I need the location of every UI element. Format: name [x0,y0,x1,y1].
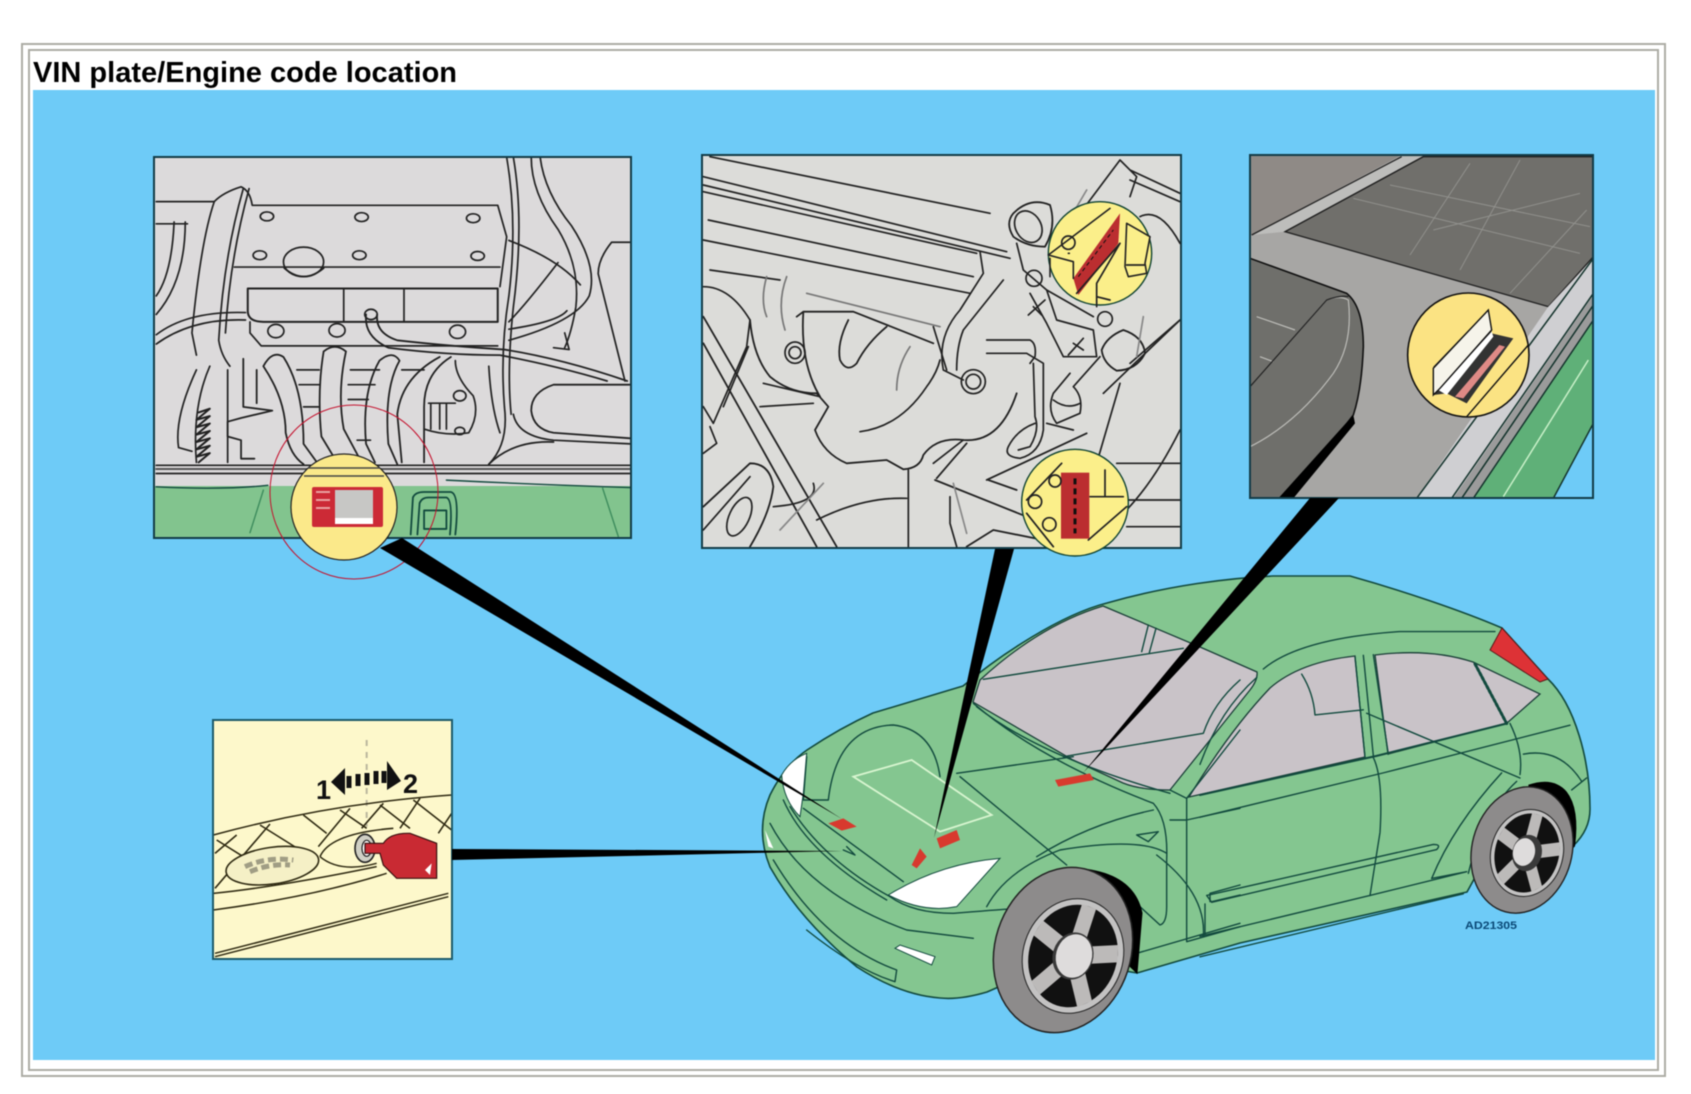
title: VIN plate/Engine code location [33,57,457,89]
far headlamp [782,753,807,817]
mat grid lines [1353,160,1590,293]
leader wedge: load floor to windscreen base [1083,498,1339,773]
red key [365,833,437,878]
magnifier: VIN plate [291,454,397,560]
car body [762,576,1590,998]
engine side line drawing [703,157,1180,547]
panel: grille key lock inset [213,720,452,959]
panel: load floor with VIN label [1250,155,1593,498]
rotation arrows and labels: 1 [316,775,331,805]
leader wedge: engine bay to car front [380,538,842,819]
leader wedge: engine side view to bonnet [934,549,1014,838]
leader wedge: key inset to grille [452,849,843,860]
red location markers [828,818,857,831]
panel: engine bay front view with VIN plate [154,157,631,538]
rotation arrows and labels: 2 [403,769,418,799]
grille and key drawing [213,740,452,957]
rear body lines [1200,632,1587,957]
seat shadow [1278,415,1355,498]
right sill strip [1417,258,1593,498]
lock [355,834,375,862]
engine line drawing [156,157,630,536]
front wheel arch shadow [1060,868,1142,973]
front door window [1189,656,1365,797]
fog lamp [895,945,935,965]
front body lines [765,625,1240,982]
rear wheel arch shadow [1528,782,1576,856]
panel: engine side view with engine code locations [702,155,1181,556]
dark carpet corner [1250,155,1402,235]
tail lamp [1490,628,1548,682]
magnifier: upper engine code [1048,202,1180,307]
windscreen [973,606,1257,790]
near headlamp [888,858,1000,908]
rear wheel [1457,775,1587,925]
front wheel [972,849,1154,1051]
car illustration [762,576,1590,1051]
badge [224,844,320,887]
clip bracket [411,492,457,535]
seat [1250,258,1363,498]
green bonnet slam panel strip [154,486,631,538]
magnifier: VIN label [1408,293,1529,417]
rear door window [1375,653,1540,754]
reference code: AD21305 [1465,920,1517,932]
rotation arrows and labels [316,761,418,805]
magnifier: lower engine code [1022,449,1128,556]
red highlight circle [270,405,438,579]
